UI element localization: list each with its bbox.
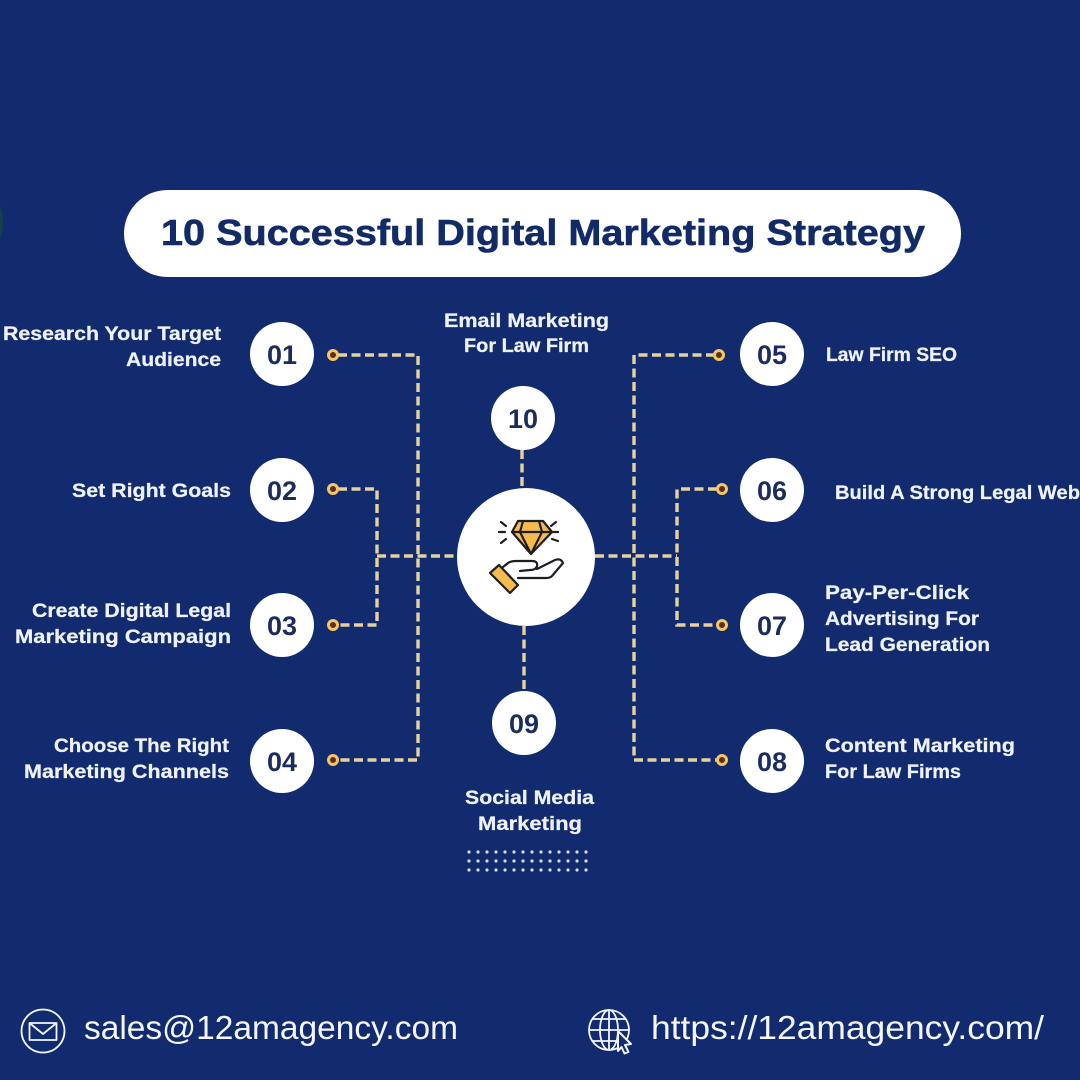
- icon: globe with cursor: [589, 1010, 631, 1054]
- item 07: Pay-Per-Click: [825, 583, 969, 604]
- item 01: Research Your Target: [3, 324, 222, 345]
- central circle with icon: [457, 488, 595, 626]
- item 02: 02: [267, 476, 297, 506]
- item 07: [740, 583, 990, 657]
- title pill: 10 Successful Digital Marketing Strategy: [161, 212, 925, 253]
- item 09: [465, 691, 594, 835]
- icon: envelope: [22, 1010, 64, 1052]
- item 06: 06: [757, 476, 787, 506]
- connector lines: right: [595, 350, 726, 764]
- item 02: [72, 458, 314, 522]
- item 01: 01: [267, 340, 297, 370]
- item 07: Lead Generation: [825, 635, 990, 656]
- item 04: [24, 729, 314, 793]
- item 08: For Law Firms: [825, 762, 961, 783]
- item 09: Marketing: [478, 814, 582, 835]
- item 05: 05: [757, 340, 787, 370]
- icon: hand: [490, 559, 563, 593]
- item 10: For Law Firm: [464, 336, 589, 357]
- item 08: 08: [757, 747, 787, 777]
- item 05: [740, 322, 957, 386]
- item 10: [444, 311, 609, 450]
- item 06: Build A Strong Legal Web: [835, 483, 1080, 504]
- item 09: Social Media: [465, 788, 594, 809]
- item 01: Audience: [126, 350, 221, 371]
- item 03: 03: [267, 611, 297, 641]
- item 03: Create Digital Legal: [32, 601, 231, 622]
- item 03: [15, 593, 314, 657]
- item 04: Marketing Channels: [24, 762, 229, 783]
- email text: sales@12amagency.com: [84, 1009, 458, 1046]
- website text: https://12amagency.com/: [651, 1009, 1045, 1046]
- item 10: 10: [508, 404, 538, 434]
- item 04: Choose The Right: [54, 736, 230, 757]
- icon: diamond: [499, 521, 558, 554]
- item 01: [3, 322, 314, 386]
- decorative edge blob: [0, 205, 3, 239]
- item 09: 09: [509, 709, 539, 739]
- item 02: Set Right Goals: [72, 481, 231, 502]
- item 08: [740, 729, 1015, 793]
- title pill: [124, 190, 961, 277]
- item 07: 07: [757, 611, 787, 641]
- item 04: 04: [267, 747, 297, 777]
- item 10: Email Marketing: [444, 311, 609, 332]
- connector lines: vertical: [522, 450, 524, 692]
- item 03: Marketing Campaign: [15, 627, 231, 648]
- item 06: [740, 458, 1080, 522]
- item 05: Law Firm SEO: [826, 345, 957, 366]
- dot pattern: [467, 850, 588, 872]
- item 07: Advertising For: [825, 609, 980, 630]
- item 08: Content Marketing: [825, 736, 1015, 757]
- connector lines: left: [328, 350, 458, 764]
